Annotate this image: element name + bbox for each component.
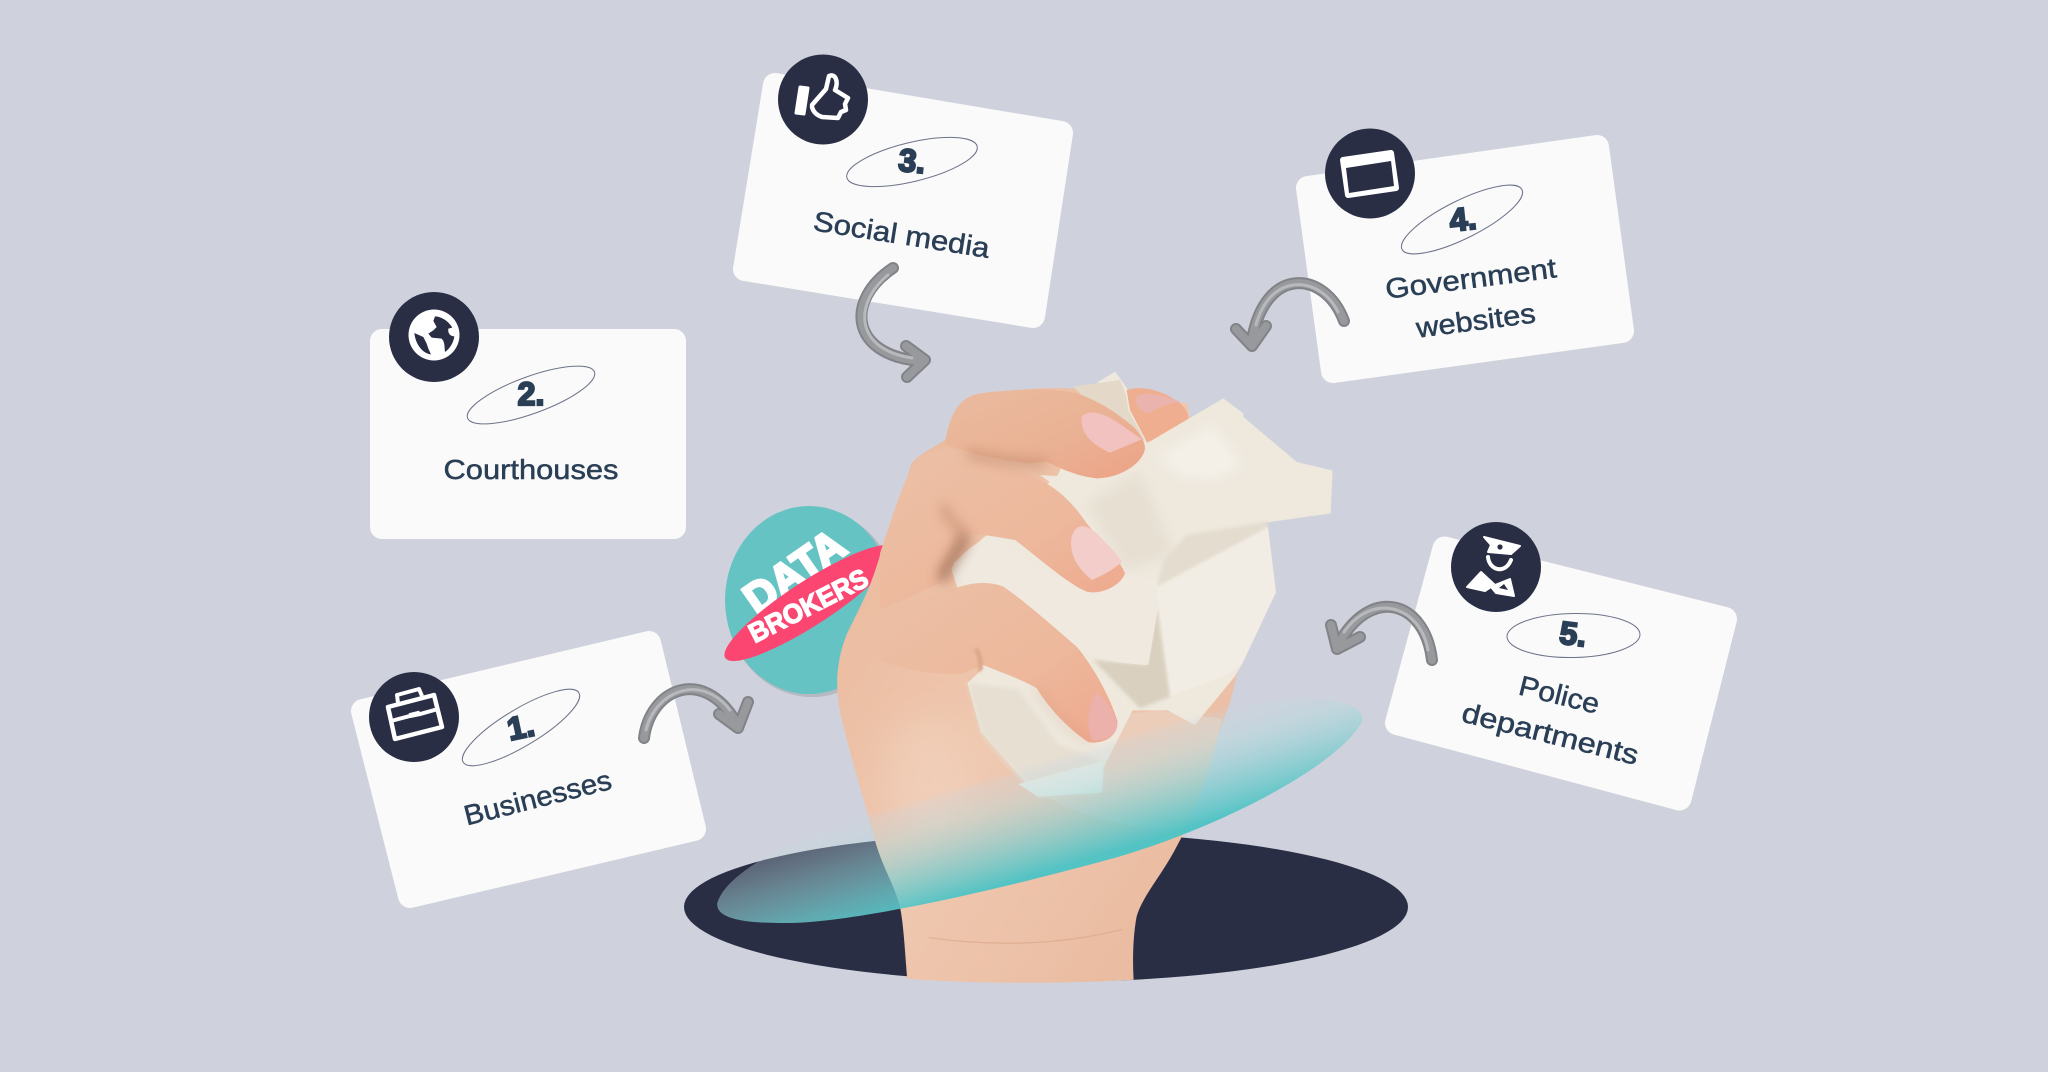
sticker pink band xyxy=(713,530,907,676)
card 5: police departments xyxy=(1397,522,1725,798)
label: police departments: departments xyxy=(1459,697,1642,771)
top finger xyxy=(945,389,1145,478)
number oval 5 xyxy=(1507,612,1640,659)
card 4: government websites xyxy=(1308,128,1622,371)
hand base and lower tissue xyxy=(837,372,1333,983)
label: police departments xyxy=(1459,670,1642,771)
arrow: government websites to hand xyxy=(1236,283,1344,346)
number oval 1: 1. xyxy=(504,707,538,747)
sticker word: brokers: BROKERS xyxy=(744,563,873,649)
number oval 2: 2. xyxy=(518,376,544,412)
label: police departments: Police xyxy=(1516,670,1603,720)
ring fingernail xyxy=(1088,692,1117,740)
number oval 5: 5. xyxy=(1558,615,1589,653)
label: courthouses: Courthouses xyxy=(444,454,618,485)
label: government websites: websites xyxy=(1413,297,1537,344)
badge: briefcase icon xyxy=(369,672,459,762)
rear fingernail xyxy=(1136,394,1181,413)
sticker: data brokers xyxy=(713,506,907,697)
arrow: social media to hand xyxy=(861,268,925,377)
upper tissue folds xyxy=(952,398,1276,708)
label: social media: Social media xyxy=(811,205,992,264)
fingers and tissue folds xyxy=(880,380,1276,743)
top fingernail xyxy=(1082,413,1142,453)
hand crumpling tissue xyxy=(717,372,1363,983)
badge: police officer icon xyxy=(1451,522,1541,612)
card 2: courthouses xyxy=(382,292,674,527)
card 1: businesses xyxy=(363,643,694,896)
number oval 2 xyxy=(461,355,601,435)
number oval 1 xyxy=(454,677,588,778)
ring finger xyxy=(880,583,1117,743)
number oval 4: 4. xyxy=(1448,200,1478,238)
sticker word: data: DATA xyxy=(735,520,855,624)
rear finger xyxy=(1127,388,1188,442)
main tissue fold xyxy=(952,535,1158,665)
number oval 3 xyxy=(842,127,982,197)
number oval 4 xyxy=(1394,173,1530,266)
arrow: police departments to hand xyxy=(1331,607,1432,660)
number oval 3: 3. xyxy=(897,142,927,180)
teal swoosh xyxy=(717,698,1363,923)
label: businesses: Businesses xyxy=(461,764,615,831)
label: government websites xyxy=(1384,252,1558,344)
badge: thumbs-up icon xyxy=(778,54,868,144)
arrow: businesses to hand xyxy=(644,689,748,738)
middle finger xyxy=(880,449,1125,610)
dark hole ellipse xyxy=(684,832,1408,982)
badge: globe icon xyxy=(389,292,479,382)
tissue flap over rear finger xyxy=(1073,380,1147,443)
label: government websites: Government xyxy=(1384,252,1558,305)
badge: browser window icon xyxy=(1325,128,1415,218)
card 3: social media xyxy=(745,54,1061,316)
middle fingernail xyxy=(1071,526,1122,580)
finger shadows xyxy=(943,453,1088,742)
